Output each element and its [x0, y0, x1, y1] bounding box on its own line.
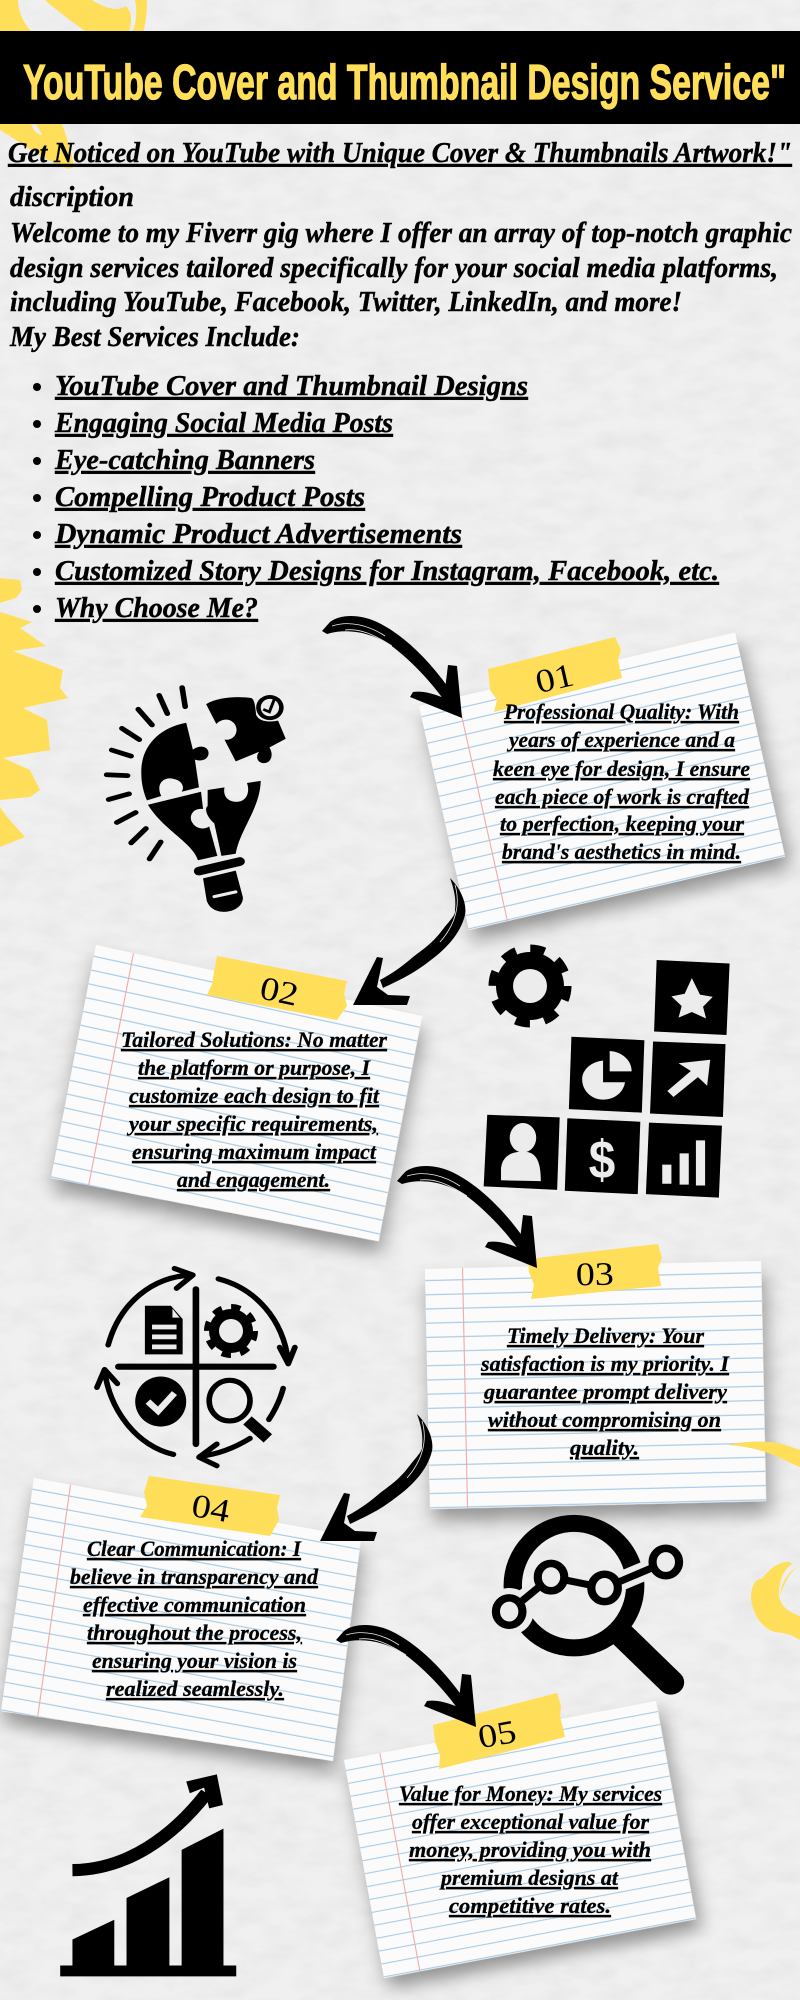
- services list: Eye-catching Banners: [54, 445, 315, 476]
- text block 02: ensuring maximum impact: [132, 1139, 377, 1164]
- text block 04: Clear Communication: I: [87, 1536, 302, 1561]
- text block 01: keen eye for design, I ensure: [493, 756, 750, 781]
- paper sheet 01: [419, 632, 785, 930]
- icon: process gear: [207, 1307, 255, 1355]
- text block 03: quality.: [570, 1435, 639, 1460]
- services list: Compelling Product Posts: [55, 482, 365, 513]
- icon: magnifier with trend line: [485, 1523, 690, 1682]
- number 05: 05: [475, 1714, 519, 1756]
- services list: Dynamic Product Advertisements: [54, 519, 462, 550]
- arrow: note 04 to note 05: [336, 1625, 476, 1727]
- icon: puzzle light bulb: [107, 688, 286, 912]
- text block 03: satisfaction is my priority. I: [480, 1351, 730, 1376]
- text block 01: each piece of work is crafted: [495, 784, 750, 809]
- text block 03: [480, 1323, 730, 1460]
- text block 04: [70, 1536, 319, 1701]
- text block 05: money, providing you with: [409, 1837, 651, 1862]
- note 05: [344, 1693, 696, 1978]
- subtitle: Get Noticed on YouTube with Unique Cover & Thumbnails Artwork!": [8, 138, 792, 169]
- description text: discription: [10, 182, 134, 213]
- paper sheet 03: [425, 1261, 766, 1509]
- text block 05: offer exceptional value for: [412, 1809, 649, 1834]
- text block 02: and engagement.: [177, 1167, 330, 1192]
- number 01: 01: [532, 657, 577, 701]
- services list: Customized Story Designs for Instagram, Facebook, etc.: [55, 556, 719, 587]
- description text: design services tailored specifically for your social media platforms,: [10, 253, 778, 284]
- number 02: 02: [257, 971, 301, 1014]
- icon: business tiles grid: [484, 960, 730, 1198]
- text block 02: your specific requirements,: [126, 1111, 378, 1136]
- arrow: bulb to note 01: [322, 616, 462, 718]
- text block 01: to perfection, keeping your: [500, 811, 744, 836]
- services list: [33, 371, 719, 624]
- text block 05: Value for Money: My services: [399, 1781, 662, 1806]
- text block 03: Timely Delivery: Your: [507, 1323, 704, 1348]
- text block 05: [399, 1781, 662, 1918]
- description text: Welcome to my Fiverr gig where I offer an array of top-notch graphic: [10, 218, 793, 249]
- note 01: [419, 632, 785, 930]
- text block 02: customize each design to fit: [129, 1083, 380, 1108]
- text block 01: Professional Quality: With: [503, 699, 739, 724]
- icon: process cycle: [97, 1268, 295, 1466]
- text block 05: competitive rates.: [449, 1893, 611, 1918]
- tape 04: [140, 1476, 280, 1536]
- arrow: note 01 to note 02: [353, 878, 465, 1005]
- text block 04: effective communication: [83, 1592, 306, 1617]
- tape 02: [207, 956, 347, 1020]
- dollar sign: $: [589, 1129, 615, 1190]
- description text: [9, 182, 793, 353]
- text block 04: realized seamlessly.: [106, 1676, 284, 1701]
- yellow brush splash: top left: [0, 0, 147, 169]
- text block 03: without compromising on: [488, 1407, 721, 1432]
- services list: YouTube Cover and Thumbnail Designs: [55, 371, 528, 402]
- paper sheet 04: [1, 1478, 364, 1772]
- tape 05: [433, 1693, 565, 1769]
- text block 04: ensuring your vision is: [92, 1648, 297, 1673]
- arrow: note 02 to note 03: [397, 1166, 537, 1268]
- icon: gear: [493, 949, 567, 1023]
- yellow brush splash: right edge: [728, 1442, 800, 1640]
- yellow brush splash: left edge: [0, 578, 68, 847]
- icon: growth bar chart: [60, 1774, 236, 1976]
- text block 02: the platform or purpose, I: [138, 1055, 371, 1080]
- note 02: [51, 945, 422, 1249]
- note 03: [425, 1244, 766, 1509]
- text block 05: premium designs at: [439, 1865, 619, 1890]
- paper sheet 05: [344, 1701, 696, 1978]
- paper sheet 02: [51, 945, 422, 1249]
- note 04: [1, 1476, 364, 1772]
- services list: Why Choose Me?: [55, 593, 258, 624]
- description text: including YouTube, Facebook, Twitter, LinkedIn, and more!: [10, 287, 682, 318]
- services list: Engaging Social Media Posts: [54, 408, 393, 439]
- text block 01: years of experience and a: [506, 727, 735, 752]
- number 04: 04: [189, 1488, 233, 1530]
- tape 01: [488, 637, 622, 712]
- description text: My Best Services Include:: [9, 322, 300, 353]
- text block 03: guarantee prompt delivery: [483, 1379, 727, 1404]
- number 03: 03: [576, 1257, 614, 1293]
- text block 01: [493, 699, 750, 864]
- text block 04: throughout the process,: [87, 1620, 302, 1645]
- text block 04: believe in transparency and: [70, 1564, 319, 1589]
- title banner: [0, 31, 800, 124]
- text block 02: Tailored Solutions: No matter: [121, 1027, 387, 1052]
- text block 01: brand's aesthetics in mind.: [502, 839, 741, 864]
- tape 03: [528, 1244, 662, 1299]
- arrow: note 03 to note 04: [320, 1414, 432, 1541]
- text block 02: [121, 1027, 387, 1192]
